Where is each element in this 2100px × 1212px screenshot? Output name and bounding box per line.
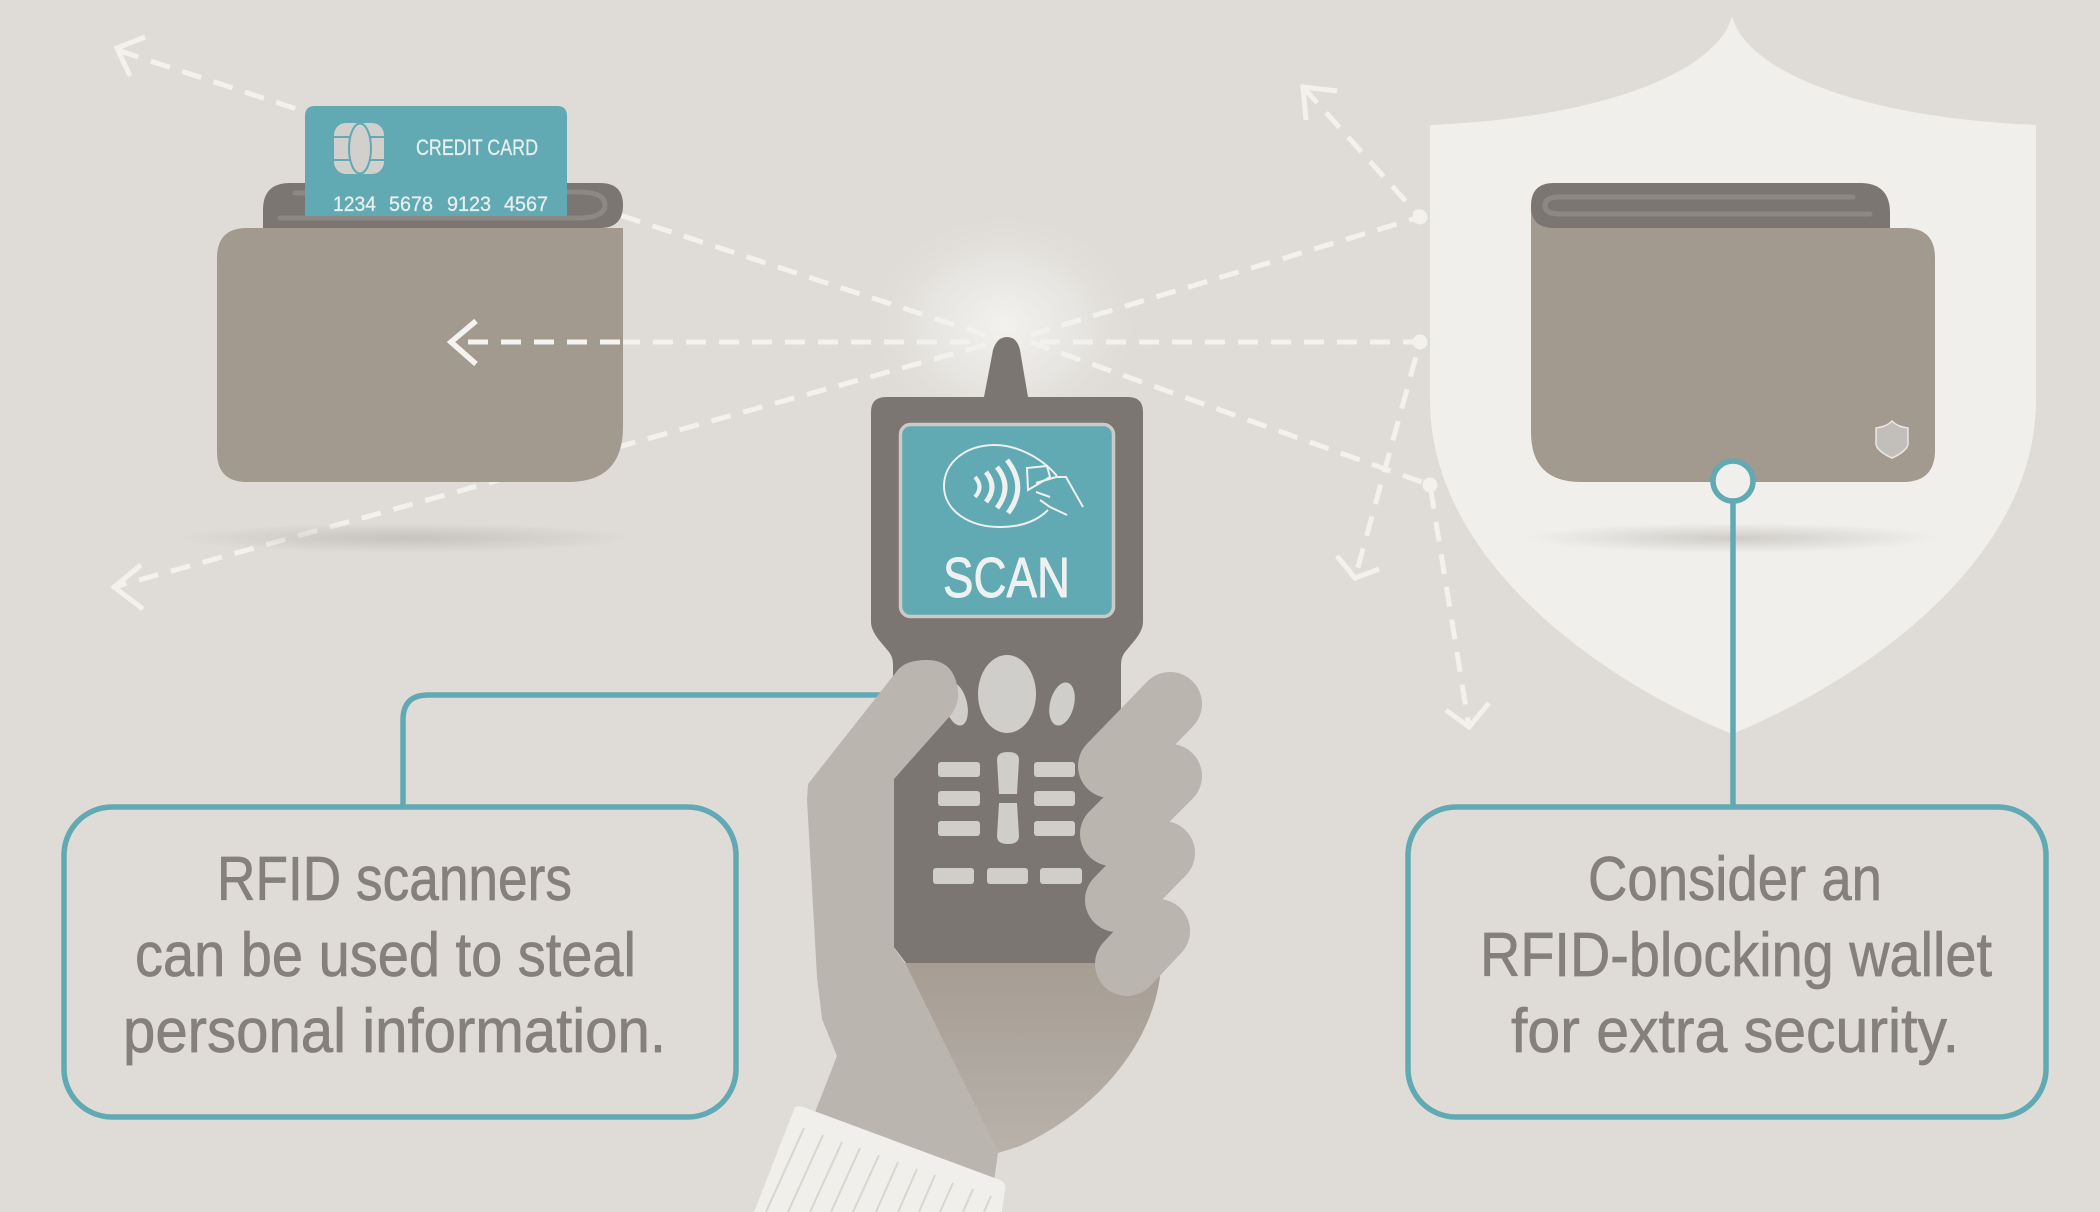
card number: 1234 xyxy=(333,193,376,216)
callout text: RFID scanners xyxy=(217,845,572,914)
wallet front xyxy=(217,228,623,482)
wallet back flap xyxy=(1531,183,1890,229)
fingers xyxy=(1110,704,1170,964)
contactless icon xyxy=(944,445,1083,527)
right RFID-blocking wallet xyxy=(1531,183,1935,482)
callout text: RFID-blocking wallet xyxy=(1480,921,1992,990)
callout text: for extra security. xyxy=(1511,997,1959,1066)
palm xyxy=(905,963,1160,1153)
mini shield emblem xyxy=(1876,421,1908,458)
callout text xyxy=(1480,845,1992,1066)
callout: RFID scanners xyxy=(64,807,736,1117)
left wallet with credit card xyxy=(217,106,623,482)
credit card xyxy=(305,106,567,216)
scanner signal glow xyxy=(864,210,1144,440)
wallet back flap xyxy=(263,183,623,229)
keypad xyxy=(933,655,1082,884)
card number: 9123 xyxy=(447,193,491,216)
screen label: SCAN xyxy=(943,546,1070,610)
wallet stitching xyxy=(280,192,605,218)
callout text: can be used to steal xyxy=(135,921,636,990)
wallet front xyxy=(1531,206,1935,482)
shield behind protected wallet xyxy=(1430,16,2036,734)
thumb and wrist xyxy=(807,660,998,1188)
card label: CREDIT CARD xyxy=(416,135,538,160)
card number: 5678 xyxy=(389,193,433,216)
callout: RFID-blocking wallet xyxy=(1408,807,2046,1117)
right connector line with ring xyxy=(1713,461,1753,807)
antenna and body xyxy=(871,337,1143,963)
right wallet shadow xyxy=(1528,523,1938,553)
callout text: personal information. xyxy=(123,997,666,1066)
left wallet shadow xyxy=(175,523,635,553)
dashed signal lines xyxy=(114,50,1469,727)
wallet stitching xyxy=(1545,197,1870,214)
callout text: Consider an xyxy=(1588,845,1882,914)
RFID scanner device xyxy=(871,337,1143,963)
signal line and arrow over wallet xyxy=(451,321,620,364)
card chip xyxy=(334,123,384,174)
callout text xyxy=(123,845,666,1066)
card number: 4567 xyxy=(504,193,548,216)
sleeve cuff xyxy=(754,1106,1005,1212)
screen xyxy=(900,424,1114,616)
arrowheads and bounce points xyxy=(114,37,1489,727)
hand holding the scanner xyxy=(754,660,1170,1212)
card number xyxy=(333,193,548,216)
left connector line xyxy=(403,695,890,807)
